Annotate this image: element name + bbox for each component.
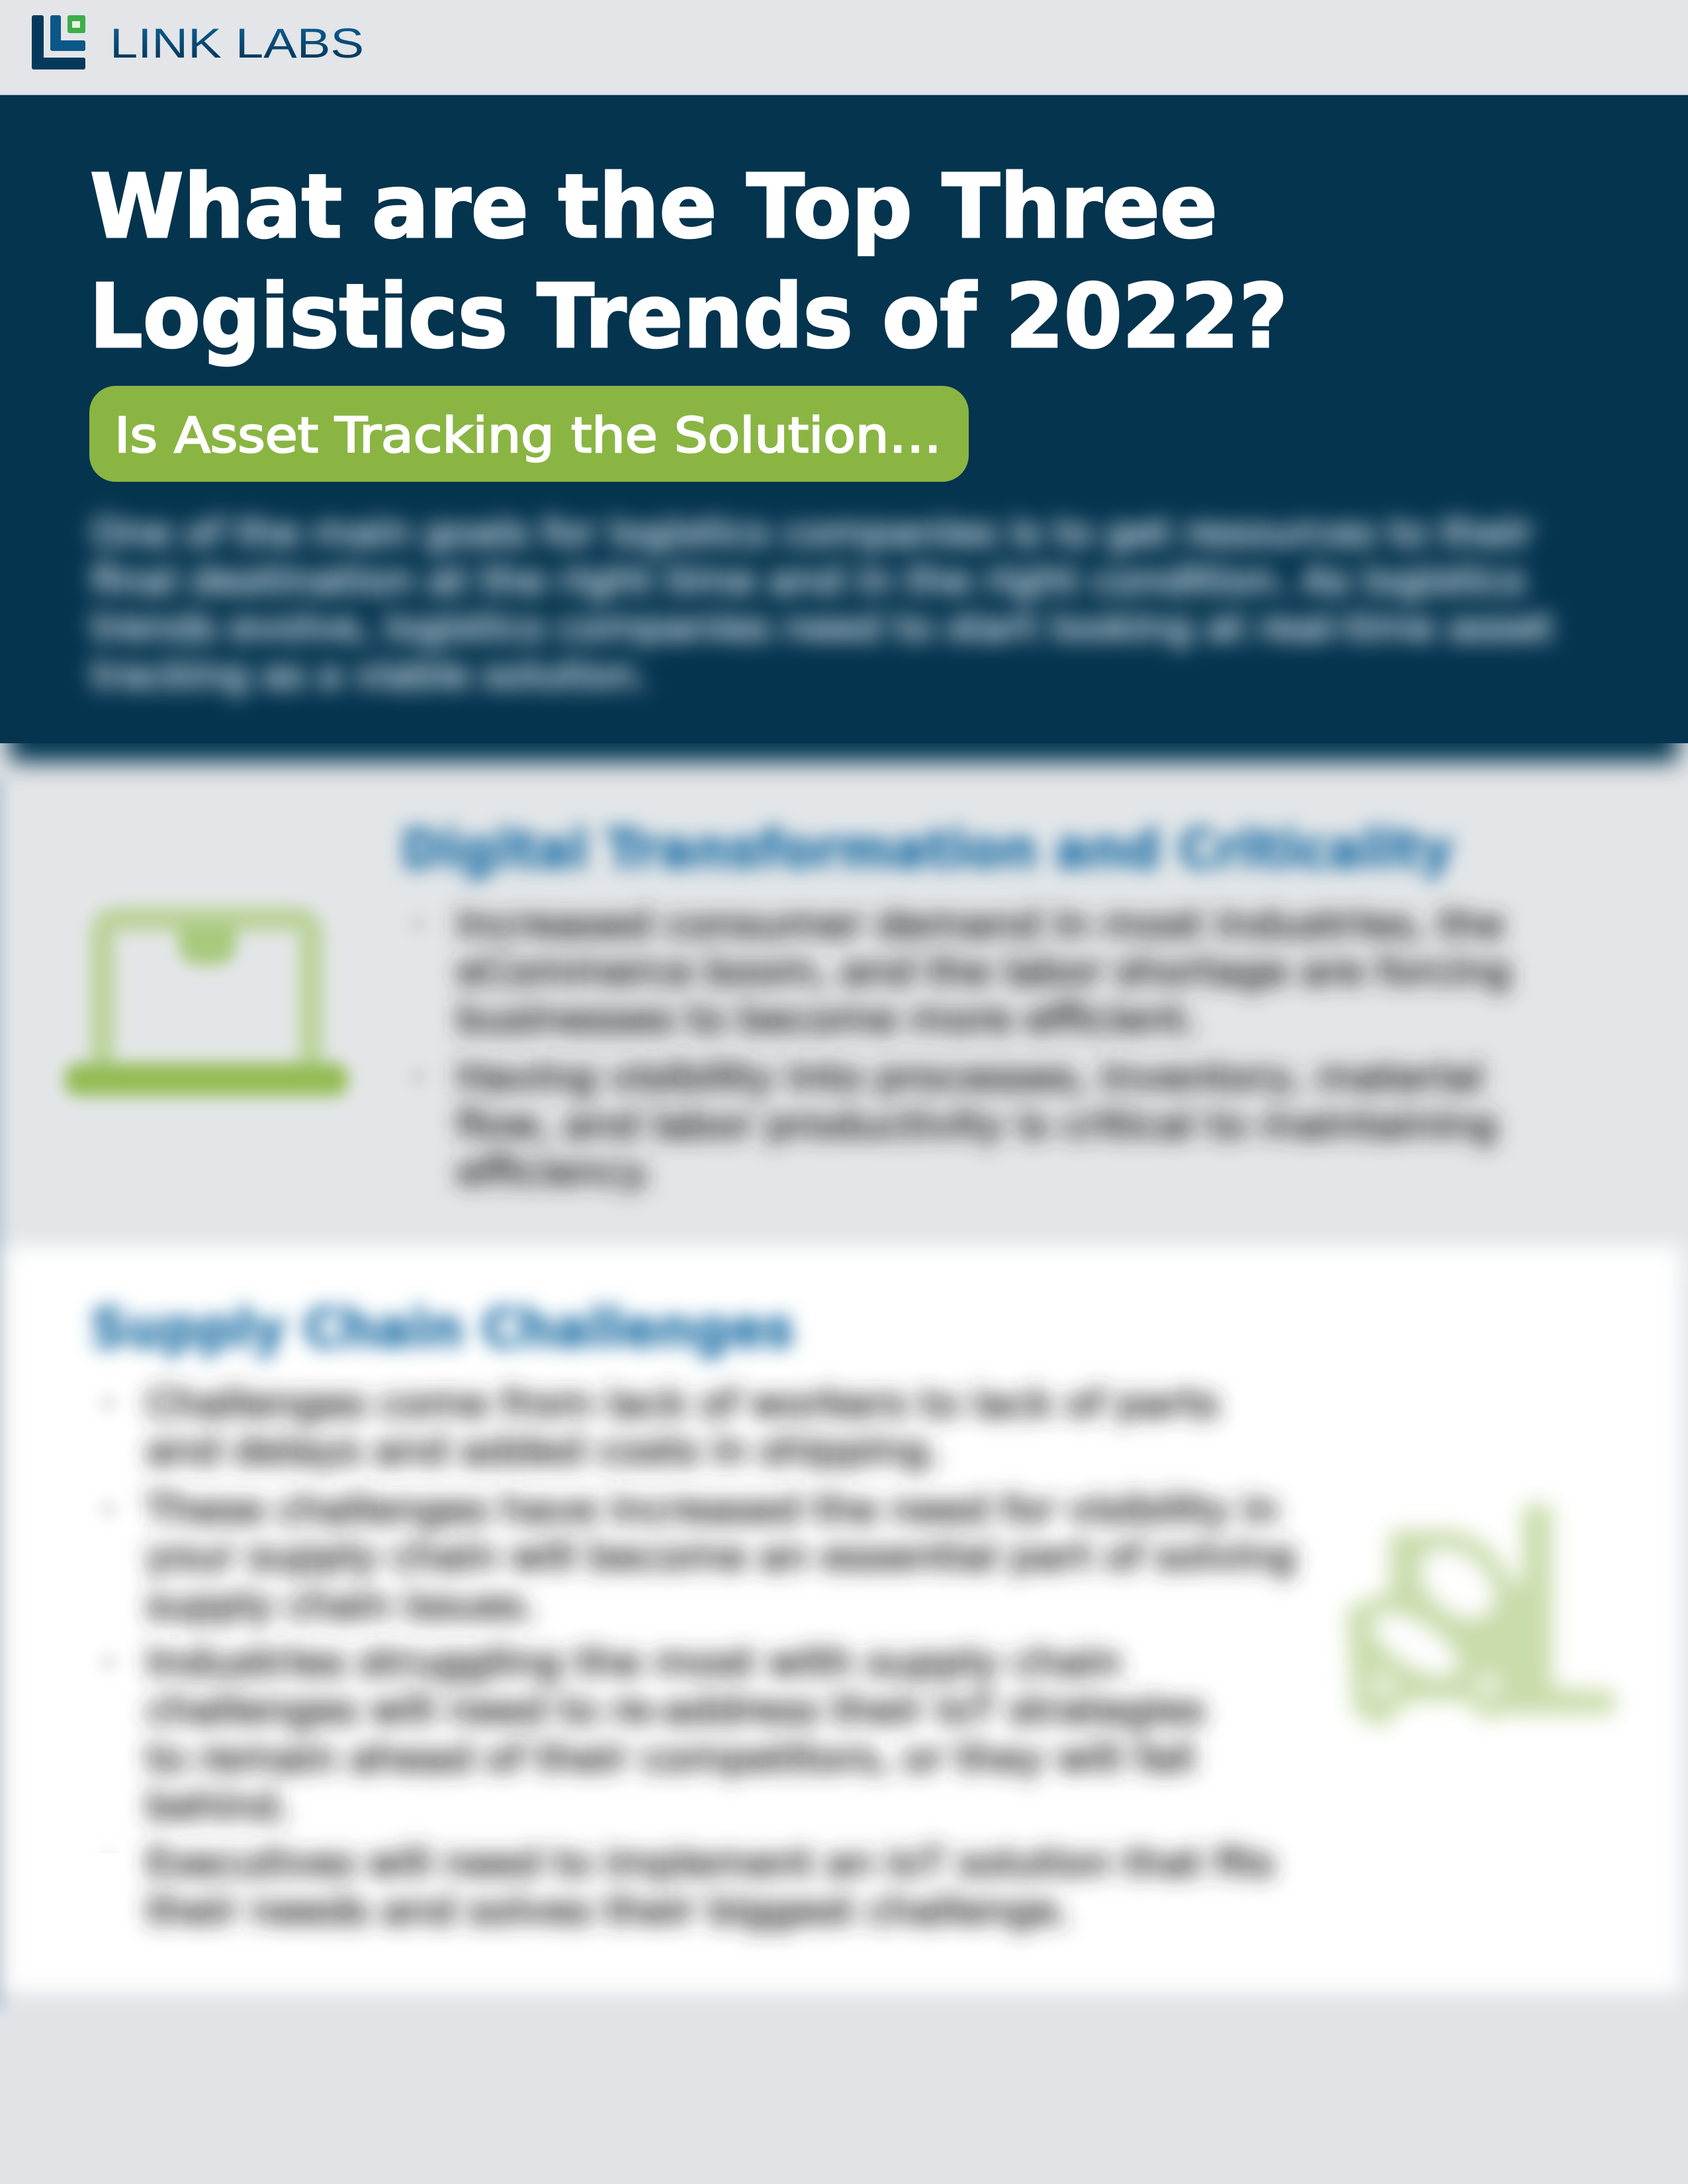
intro paragraph: trends evolve, logistics companies need to start looking at real-time asset xyxy=(91,606,1553,649)
intro paragraph: final destination at the right time and in the right condition. As logistics xyxy=(91,559,1525,602)
bullet text: and delays and added costs in shipping. xyxy=(146,1430,940,1473)
subtitle pill: Is Asset Tracking the Solution… xyxy=(114,408,942,464)
intro paragraph: tracking as a viable solution. xyxy=(91,654,648,697)
logo xyxy=(32,15,364,69)
heading: supply chain challenges: Supply Chain Challenges xyxy=(91,1298,794,1359)
panel: header xyxy=(0,95,1688,743)
bullet text xyxy=(457,903,1511,1194)
bullet text: Challenges come from lack of workers to lack of parts xyxy=(146,1383,1219,1426)
bullet text: supply chain issues. xyxy=(146,1584,536,1627)
icon: laptop xyxy=(65,919,348,1096)
header shadow xyxy=(9,718,1678,762)
bullet text: Increased consumer demand in most industries, the xyxy=(457,903,1504,946)
title: What are the Top Three xyxy=(90,156,1218,258)
intro paragraph: One of the main goals for logistics companies is to get resources to their xyxy=(91,512,1533,555)
subtitle pill xyxy=(89,386,969,482)
bullet text xyxy=(146,1383,1296,1933)
logo mark xyxy=(32,15,85,69)
bullet list xyxy=(410,903,1511,1194)
bullet text: eCommerce boom, and the labor shortage are forcing xyxy=(457,950,1511,993)
icon: forklift xyxy=(1347,1504,1615,1727)
bullet text: your supply chain will become an essential part of solving xyxy=(146,1535,1296,1578)
title xyxy=(89,156,1288,368)
bullet text: These challenges have increased the need for visibility in xyxy=(146,1488,1278,1531)
bullet list xyxy=(101,1383,1296,1933)
bullet markers xyxy=(101,1395,116,1870)
panel: digital transformation xyxy=(65,819,1511,1194)
bullet text: to remain ahead of their competitors, or they will fall xyxy=(146,1737,1195,1780)
bullet text: challenges will need to re-address their IoT strategies xyxy=(146,1689,1205,1732)
bullet text: businesses to become more efficient. xyxy=(457,998,1198,1041)
bullet text: efficiency. xyxy=(457,1151,652,1194)
bullet text: Executives will need to implement an IoT solution that fits xyxy=(146,1842,1274,1885)
heading: digital transformation: Digital Transformation and Criticality xyxy=(401,819,1453,880)
bullet text: flow, and labor productivity is critical to maintaining xyxy=(457,1104,1497,1147)
bullet markers xyxy=(410,916,426,1085)
bullet text: Industries struggling the most with supply chain xyxy=(146,1641,1122,1684)
bullet text: behind. xyxy=(146,1785,290,1828)
title: Logistics Trends of 2022? xyxy=(89,266,1288,368)
logo wordmark: LINK LABS xyxy=(110,21,364,67)
left edge strip xyxy=(0,778,4,2009)
bullet text: Having visibility into processes, inventory, material xyxy=(457,1056,1484,1099)
intro paragraph xyxy=(91,512,1553,697)
bullet text: their needs and solves their biggest challenge. xyxy=(146,1889,1070,1933)
panel: supply chain challenges xyxy=(7,1247,1681,1992)
